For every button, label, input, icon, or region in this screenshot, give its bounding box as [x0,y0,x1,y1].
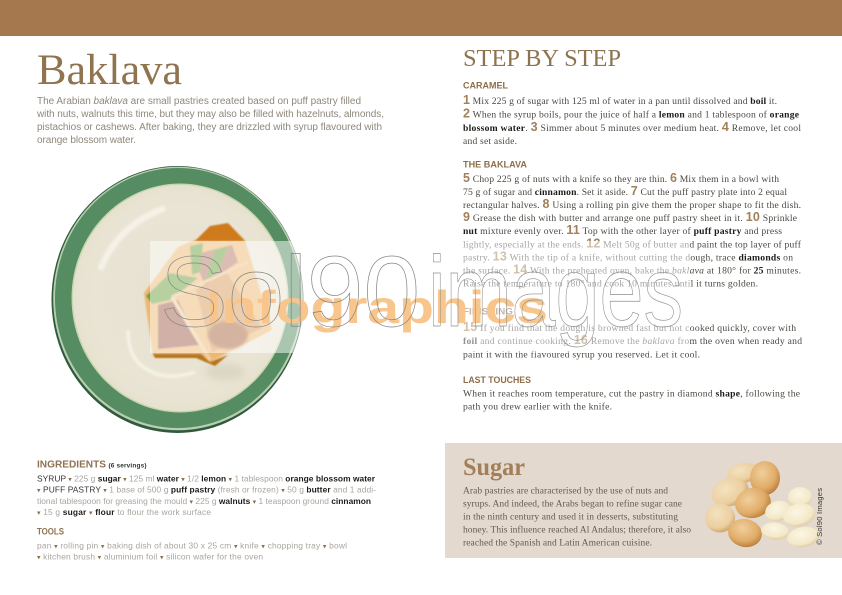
sugar text: in the ninth century and used it in desserts, substituting [463,512,678,522]
section: ingredients: ▾ 15 g sugar ▾ flour to flour the work surface [37,507,211,517]
section: the baklava [463,160,802,290]
section: last touches: When it reaches room temperature, cut the pastry in diamond shape, following the [463,388,800,400]
heading: step by step: STEP BY STEP [463,46,621,72]
sugar text [463,486,691,548]
watermark [150,236,690,353]
section: caramel [463,80,801,147]
sugar text: syrups. And indeed, the Arabs began to refine sugar cane [463,498,682,510]
section: ingredients: (6 servings) [108,462,146,470]
section: tools: pan ▾ rolling pin ▾ baking dish of about 30 x 25 cm ▾ knife ▾ chopping tray ▾ bowl [37,540,347,550]
section: last touches: path you drew earlier with the knife. [463,402,612,412]
section: the baklava: nut mixture evenly over. 11 Top with the other layer of puff pastry and press [463,223,782,237]
section: caramel: 1 Mix 225 g of sugar with 125 ml of water in a pan until dissolved and boil it. [463,93,777,107]
section: finishing touches: paint it with the flavoured syrup you reserved. Let it cool. [463,350,700,360]
section: finishing touches: foil and continue cooking. 16 Remove the baklava from the oven when ready and [463,333,802,347]
section: caramel: and set aside. [463,136,517,147]
section: the baklava: 5 Chop 225 g of nuts with a knife so they are thin. 6 Mix them in a bowl with [463,171,779,185]
watermark: Infographics [206,281,548,333]
section: ingredients: INGREDIENTS [37,458,106,470]
panel: sugar [445,443,842,558]
section: the baklava: 75 g of sugar and cinnamon. Set it aside. 7 Cut the puff pastry plate into 2 equal [463,184,787,198]
section: tools: TOOLS [37,526,64,538]
section: ingredients: SYRUP ▾ 225 g sugar ▾ 125 ml water ▾ 1/2 lemon ▾ 1 tablespoon orange blossom water [37,474,376,484]
photo: baklava on a plate [52,166,304,433]
section: tools [37,526,347,562]
sugar heading: Sugar [463,454,525,481]
watermark: images [428,236,683,348]
photo credit: © Sol90 Images [815,488,824,545]
intro text [36,96,384,146]
section: last touches [463,375,800,412]
header bar [0,0,842,36]
section: the baklava: THE BAKLAVA [463,160,527,170]
section: finishing touches: 15 If you find that the dough is browned fast but not cooked quickly, cover with [463,320,796,334]
section: ingredients [37,458,376,517]
intro text: pistachios or cashews. After baking, they are drizzled with syrup flavoured with [37,122,382,133]
sugar text: reached the Spanish and Latin American cuisine. [463,538,652,548]
section: tools: ▾ kitchen brush ▾ aluminium foil ▾ silicon wafer for the oven [37,552,263,562]
icon: almonds [705,460,820,550]
section: the baklava: Raise the temperature to 180° and cook 10 minutes until it turns golden. [463,278,758,290]
section: the baklava: lightly, especially at the ends. 12 Melt 50g of butter and paint the top layer of puff [463,236,802,250]
section: the baklava: 9 Grease the dish with butter and arrange one puff pastry sheet in it. 10 Sprinkle [463,210,797,224]
intro text: The Arabian baklava are small pastries created based on puff pastry filled [37,96,361,107]
section: the baklava: rectangular halves. 8 Using a rolling pin give them the proper shape to fit the dish. [463,197,801,211]
section: caramel: CARAMEL [463,80,508,90]
section: ingredients: ▾ PUFF PASTRY ▾ 1 base of 500 g puff pastry (fresh or frozen) ▾ 50 g butter and 1 addi- [37,484,376,494]
pastry slices [144,223,272,366]
sugar text: Arab pastries are characterised by the use of nuts and [463,486,668,496]
intro text: orange blossom water. [37,135,136,146]
section: the baklava: the surface. 14 With the preheated oven, bake the baklava at 180° for 25 minutes. [463,262,801,276]
section: finishing touches [463,306,802,360]
sugar text: honey. This influence reached Al Andalus; therefore, it also [463,524,691,536]
section: last touches: LAST TOUCHES [463,375,531,385]
section: finishing touches: FINISHING [463,306,513,316]
section: caramel: blossom water. 3 Simmer about 5 minutes over medium heat. 4 Remove, let cool [463,120,801,134]
title: Baklava [37,46,182,94]
section: caramel: 2 When the syrup boils, pour the juice of half a lemon and 1 tablespoon of orange [463,106,800,120]
watermark: Sol90 [160,236,420,348]
intro text: with nuts, walnuts this time, but they may also be filled with hazelnuts, almonds, [36,109,384,120]
section: the baklava: pastry. 13 With the tip of a knife, without cutting the dough, trace diamonds on [463,250,793,264]
section: ingredients: tional tablespoon for greasing the mould ▾ 225 g walnuts ▾ 1 teaspoon ground cinnamon [37,496,371,506]
